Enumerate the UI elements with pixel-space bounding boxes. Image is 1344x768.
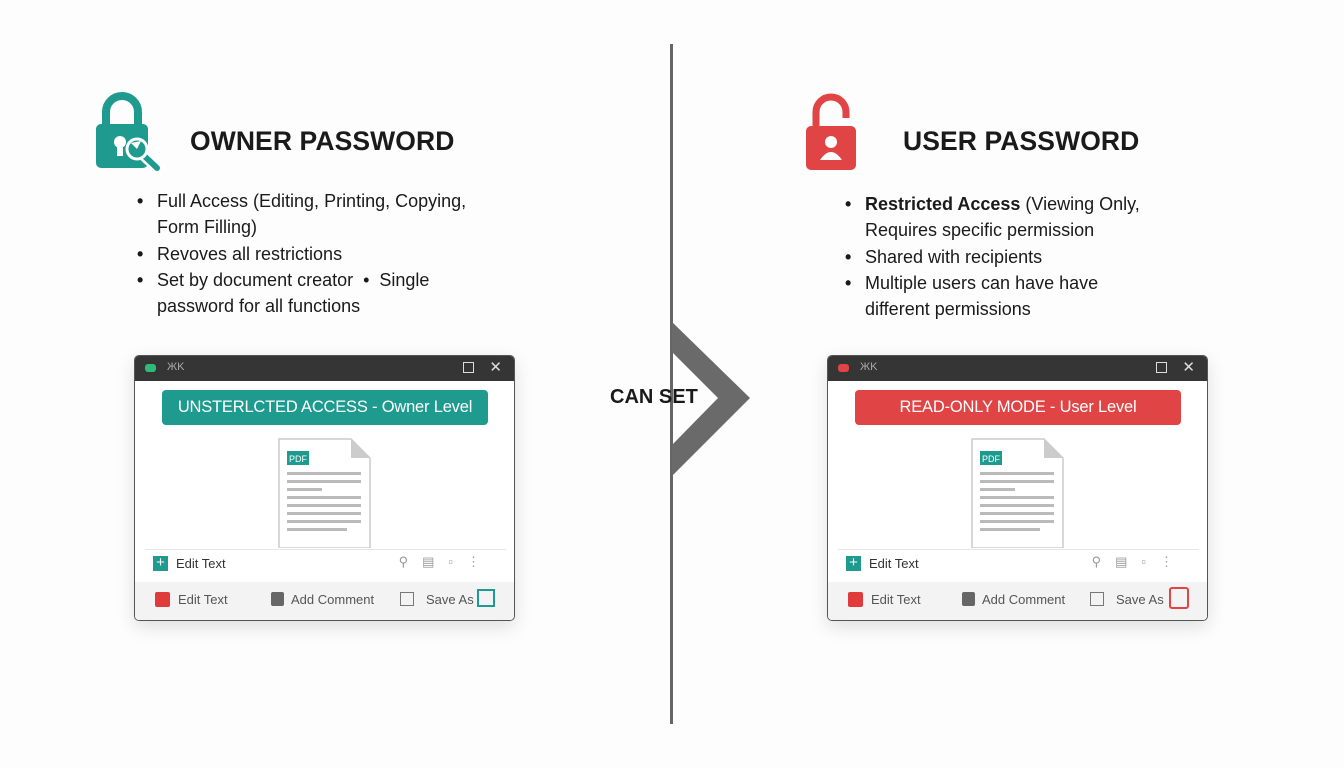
toolbar (145, 549, 506, 576)
owner bullets: Full Access (Editing, Printing, Copying, Form Filling) (157, 191, 466, 237)
toolbar: ⚲▤▫⋮ (399, 554, 494, 569)
user bullets: Multiple users can have have different permissions (865, 273, 1098, 319)
banner: read-only: READ-ONLY MODE - User Level (900, 398, 1136, 416)
window: owner: ✕ (489, 359, 502, 376)
pdf document: PDF (289, 454, 308, 464)
icon: user lock (806, 94, 856, 170)
toolbar (838, 549, 1199, 576)
icon: owner lock with wrench (96, 92, 160, 171)
window: user: ✕ (1182, 359, 1195, 376)
pdf document (971, 438, 1064, 548)
banner: unrestricted (162, 390, 488, 425)
user bullets (846, 194, 1140, 319)
bottom bar: Edit Text (871, 592, 921, 607)
window: user (827, 355, 1208, 621)
heading: user password: USER PASSWORD (903, 126, 1139, 156)
bottom bar: Edit Text (178, 592, 228, 607)
bottom bar: Save As (1116, 592, 1164, 607)
user bullets: Restricted Access (Viewing Only, Requires specific permission (865, 194, 1140, 240)
banner: read-only (855, 390, 1181, 425)
bottom bar (828, 582, 1207, 622)
banner: unrestricted: UNSTERLCTED ACCESS - Owner Level (178, 398, 472, 416)
owner bullets: Revoves all restrictions (157, 244, 342, 264)
pdf document: PDF (982, 454, 1001, 464)
toolbar: + (849, 554, 858, 571)
toolbar: Edit Text (869, 556, 919, 571)
window: owner (134, 355, 515, 621)
bottom bar: Save As (426, 592, 474, 607)
label: can set: CAN SET (610, 386, 698, 408)
pdf document (278, 438, 371, 548)
owner bullets (138, 191, 466, 316)
toolbar: Edit Text (176, 556, 226, 571)
user bullets: Shared with recipients (865, 247, 1042, 267)
window: user: ЖK (860, 361, 878, 373)
owner bullets: Set by document creator • Single password for all functions (157, 270, 429, 316)
bottom bar: Add Comment (982, 592, 1065, 607)
bottom bar (135, 582, 514, 622)
toolbar: + (156, 554, 165, 571)
bottom bar: Add Comment (291, 592, 374, 607)
toolbar: ⚲▤▫⋮ (1092, 554, 1187, 569)
heading: owner password: OWNER PASSWORD (190, 126, 454, 156)
window: owner: ЖK (167, 361, 184, 373)
